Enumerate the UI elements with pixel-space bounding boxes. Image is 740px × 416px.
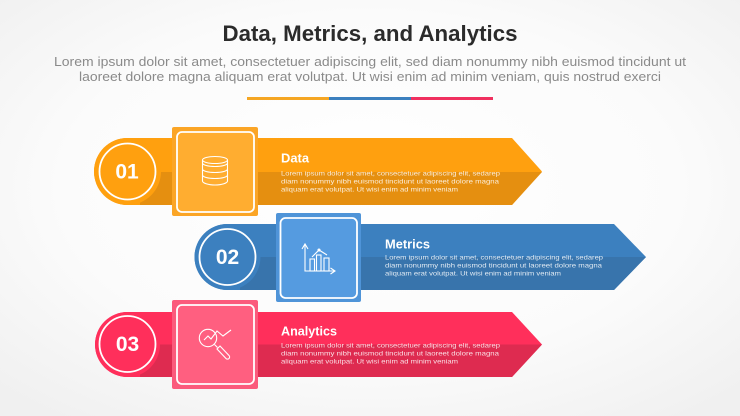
panel: 01 Data <box>94 127 542 216</box>
description: analytics <box>281 342 500 366</box>
title: Data, Metrics, and Analytics <box>222 21 518 46</box>
icon card: metrics <box>276 213 361 302</box>
description: analytics: aliquam erat volutpat. Ut wisi enim ad minim veniam <box>281 358 458 366</box>
arrow bar: metrics <box>194 224 646 290</box>
number badge: 02 <box>194 224 260 290</box>
arrow bar: analytics <box>95 312 542 377</box>
description: analytics: Lorem ipsum dolor sit amet, consectetuer adipiscing elit, sedarep <box>281 342 500 350</box>
number badge: 03: 03 <box>116 333 139 356</box>
number badge: 03 <box>95 312 160 377</box>
heading: Analytics: Analytics <box>281 324 337 338</box>
number badge: 02: 02 <box>216 246 239 269</box>
description: metrics: diam nonummy nibh euismod tincidunt ut laoreet dolore magna <box>385 262 602 270</box>
description: metrics: aliquam erat volutpat. Ut wisi enim ad minim veniam <box>385 270 561 278</box>
description: data: aliquam erat volutpat. Ut wisi enim ad minim veniam <box>281 186 458 194</box>
description: data <box>281 170 500 194</box>
panel: 03 Analytics <box>95 300 542 389</box>
description: analytics: diam nonummy nibh euismod tincidunt ut laoreet dolore magna <box>281 350 499 358</box>
icon: database <box>202 156 228 185</box>
subtitle text: laoreet dolore magna aliquam erat volutpat. Ut wisi enim ad minim veniam, quis nostrud exerci <box>79 69 661 84</box>
arrow bar: data <box>94 138 542 205</box>
description: metrics <box>385 254 603 278</box>
icon card: analytics <box>172 300 258 389</box>
description: data: diam nonummy nibh euismod tincidunt ut laoreet dolore magna <box>281 178 499 186</box>
number badge: 01 <box>94 138 161 205</box>
panel: 02 Metrics <box>194 213 646 302</box>
description: data: Lorem ipsum dolor sit amet, consectetuer adipiscing elit, sedarep <box>281 170 500 178</box>
subtitle text: Lorem ipsum dolor sit amet, consectetuer adipiscing elit, sed diam nonummy nibh euismod tincidunt ut <box>54 54 686 69</box>
number badge: 01: 01 <box>115 160 139 184</box>
description: metrics: Lorem ipsum dolor sit amet, consectetuer adipiscing elit, sedarep <box>385 254 603 262</box>
icon card: data <box>172 127 258 216</box>
tricolor divider <box>247 97 493 100</box>
heading: Metrics: Metrics <box>385 238 430 252</box>
subtitle text <box>54 54 686 84</box>
icon: magnifier with trend line <box>199 329 231 359</box>
icon: bar chart with arrows <box>302 244 335 274</box>
heading: Data: Data <box>281 152 310 166</box>
